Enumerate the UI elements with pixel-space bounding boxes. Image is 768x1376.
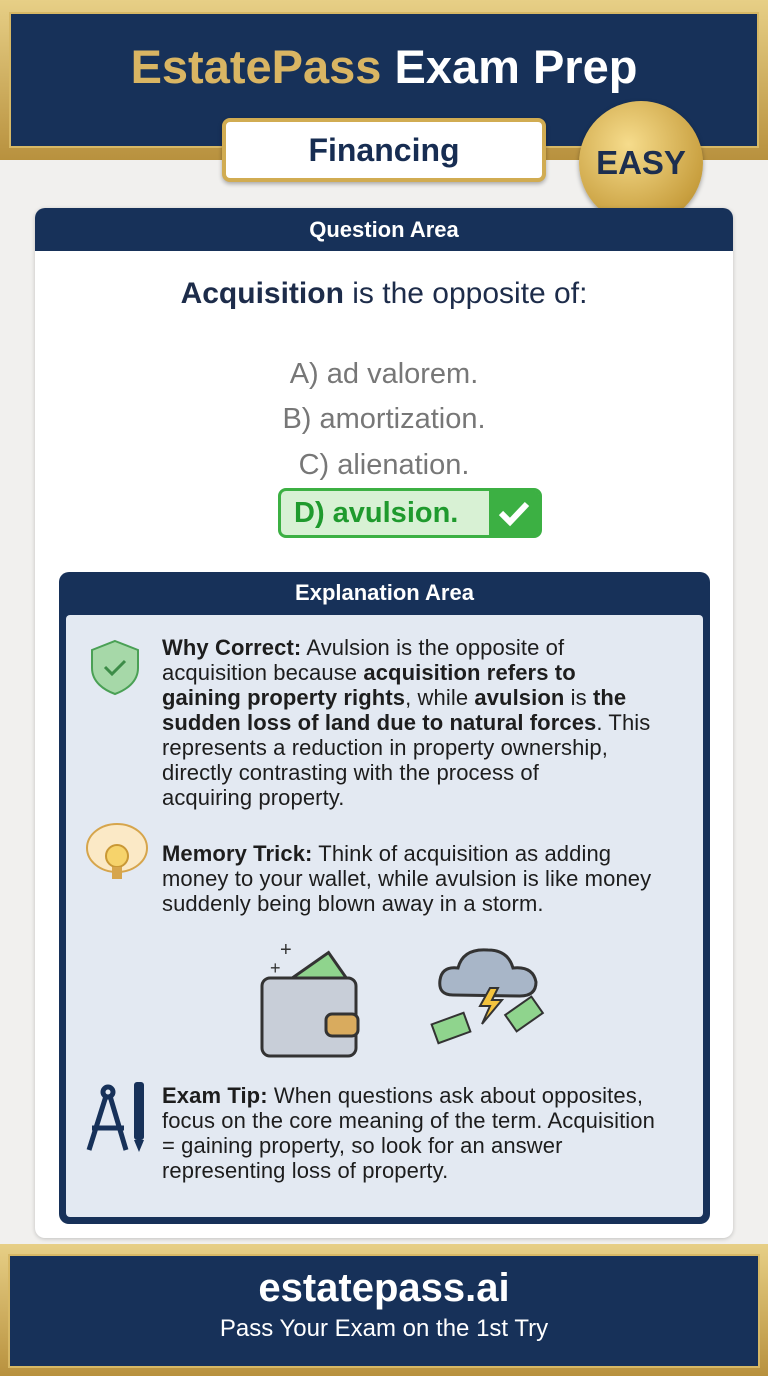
footer url: estatepass.ai (258, 1266, 510, 1310)
text: why correct: directly contrasting with the process of (162, 760, 539, 785)
badge: EASY (579, 101, 703, 225)
icon: storm with money (430, 948, 544, 1044)
heading: Question Area: Question Area (309, 217, 459, 242)
text: exam tip: Exam Tip: When questions ask about opposites, (162, 1083, 643, 1108)
heading: Explanation Area: Explanation Area (295, 580, 474, 605)
text: why correct: represents a reduction in property ownership, (162, 735, 608, 760)
icon: wallet with money: + (280, 939, 292, 961)
icon: check (489, 491, 539, 535)
title: EstatePass Exam Prep (131, 40, 637, 93)
text: why correct: Why Correct: Avulsion is the opposite of (162, 635, 564, 660)
ribbon: Financing (222, 118, 546, 182)
text: memory trick: suddenly being blown away in a storm. (162, 891, 544, 916)
text: memory trick: money to your wallet, while avulsion is like money (162, 866, 651, 891)
icon: wallet with money: + (270, 958, 281, 978)
header banner (0, 0, 768, 160)
panel: question (35, 208, 733, 1238)
icon: brain bulb (86, 823, 148, 879)
icon: compass and pencil (86, 1082, 144, 1152)
icon: wallet with money (260, 939, 360, 1058)
text: memory trick: Memory Trick: Think of acquisition as adding (162, 841, 611, 866)
footer tagline: Pass Your Exam on the 1st Try (220, 1315, 548, 1342)
text: memory trick (162, 841, 651, 916)
option A: A) ad valorem. (290, 358, 478, 390)
heading: Question Area (35, 208, 733, 251)
icon: shield (91, 640, 139, 696)
text: exam tip (162, 1083, 655, 1183)
correct answer D (278, 488, 542, 538)
text: exam tip: focus on the core meaning of the term. Acquisition (162, 1108, 655, 1133)
option C: C) alienation. (299, 449, 469, 481)
ribbon: Financing: Financing (308, 132, 460, 168)
option B: B) amortization. (282, 403, 486, 435)
badge: EASY: EASY (596, 144, 686, 181)
text: why correct: sudden loss of land due to natural forces. This (162, 710, 650, 735)
footer (0, 1244, 768, 1376)
panel: explanation (59, 572, 710, 1224)
text: why correct: acquisition because acquisition refers to (162, 660, 576, 685)
text: why correct (162, 635, 650, 810)
question text: Acquisition is the opposite of: (181, 277, 587, 310)
correct answer D: D) avulsion. (294, 497, 458, 529)
text: why correct: gaining property rights, while avulsion is the (162, 685, 626, 710)
text: why correct: acquiring property. (162, 785, 344, 810)
text: exam tip: = gaining property, so look for an answer (162, 1133, 563, 1158)
text: exam tip: representing loss of property. (162, 1158, 448, 1183)
